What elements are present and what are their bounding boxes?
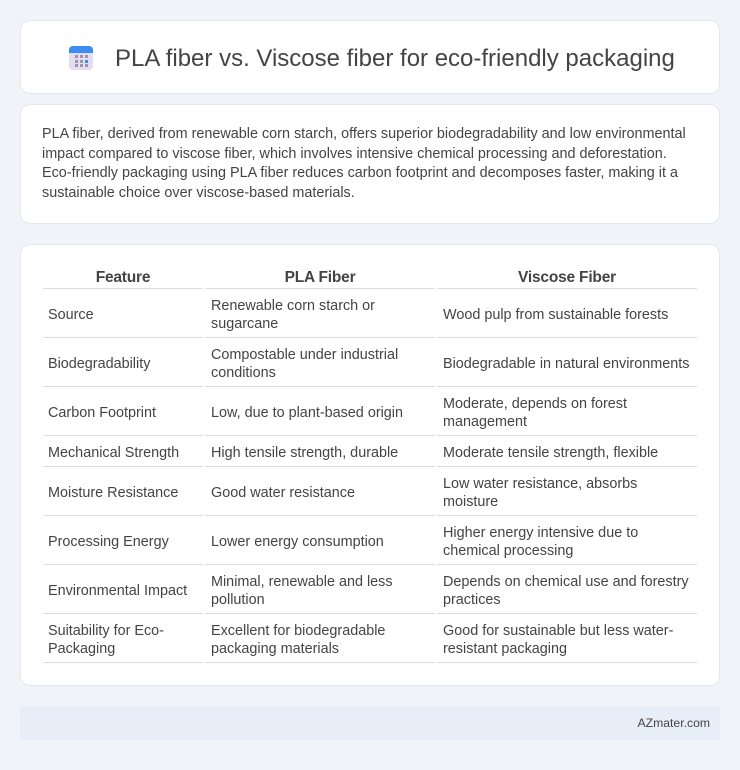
row: Moisture Resistance: moisture — [443, 494, 498, 510]
row: Moisture Resistance: Moisture Resistance — [48, 485, 178, 501]
row: Carbon Footprint: management — [443, 414, 527, 430]
row: Biodegradability: Biodegradable in natural environments — [443, 356, 689, 372]
row: Moisture Resistance: Low water resistance, absorbs — [443, 476, 637, 492]
row: Carbon Footprint: Low, due to plant-based origin — [211, 405, 403, 421]
row: Mechanical Strength: High tensile strength, durable — [211, 445, 398, 461]
intro text: impact compared to viscose fiber, which involves intensive chemical processing and deforestation. — [42, 146, 667, 162]
row: Suitability for Eco-Packaging: Packaging — [48, 641, 115, 657]
row: Carbon Footprint: Carbon Footprint — [48, 405, 156, 421]
header panel — [20, 20, 720, 94]
footer credit: AZmater.com — [638, 716, 710, 730]
row: Source — [48, 298, 668, 332]
row: Mechanical Strength: Moderate tensile strength, flexible — [443, 445, 658, 461]
row: Mechanical Strength: Mechanical Strength — [48, 445, 179, 461]
header: Feature: Feature — [96, 269, 150, 286]
header: Viscose Fiber: Viscose Fiber — [518, 269, 616, 286]
row: Processing Energy: Higher energy intensive due to — [443, 525, 638, 541]
row: Processing Energy — [48, 525, 638, 559]
table — [43, 269, 697, 663]
row: Suitability for Eco-Packaging: Good for sustainable but less water- — [443, 623, 673, 639]
intro text: sustainable choice over viscose-based materials. — [42, 185, 355, 201]
row: Processing Energy: Lower energy consumption — [211, 534, 384, 550]
row: Environmental Impact: Minimal, renewable and less — [211, 574, 393, 590]
header: PLA Fiber: PLA Fiber — [285, 269, 355, 286]
intro text — [42, 126, 686, 201]
row: Suitability for Eco-Packaging: Excellent for biodegradable — [211, 623, 385, 639]
intro text: PLA fiber, derived from renewable corn starch, offers superior biodegradability and low environmental — [42, 126, 686, 142]
row: Suitability for Eco-Packaging: Suitability for Eco- — [48, 623, 164, 639]
row: Moisture Resistance: Good water resistance — [211, 485, 355, 501]
row: Source: Renewable corn starch or — [211, 298, 375, 314]
intro panel — [20, 104, 720, 224]
row: Source: sugarcane — [211, 316, 278, 332]
row: Environmental Impact: Depends on chemical use and forestry — [443, 574, 689, 590]
row: Carbon Footprint: Moderate, depends on forest — [443, 396, 627, 412]
row: Mechanical Strength — [48, 445, 658, 461]
row: Processing Energy: chemical processing — [443, 543, 573, 559]
comparison table panel — [20, 244, 720, 686]
row: Processing Energy: Processing Energy — [48, 534, 169, 550]
row: Environmental Impact: pollution — [211, 592, 265, 608]
row: Biodegradability: conditions — [211, 365, 276, 381]
row: Biodegradability — [48, 347, 689, 381]
title: PLA fiber vs. Viscose fiber for eco-friendly packaging — [115, 45, 675, 72]
row: Environmental Impact: practices — [443, 592, 501, 608]
row: Suitability for Eco-Packaging — [48, 623, 673, 657]
footer bar — [20, 706, 720, 740]
row: Biodegradability: Biodegradability — [48, 356, 150, 372]
row: Environmental Impact: Environmental Impact — [48, 583, 187, 599]
row: Source: Source — [48, 307, 94, 323]
row: Moisture Resistance — [48, 476, 637, 510]
intro text: Eco-friendly packaging using PLA fiber reduces carbon footprint and decomposes faster, making it a — [42, 165, 678, 181]
row: Environmental Impact — [48, 574, 689, 608]
icon: calendar — [69, 46, 93, 70]
row: Suitability for Eco-Packaging: resistant packaging — [443, 641, 567, 657]
row: Suitability for Eco-Packaging: packaging materials — [211, 641, 339, 657]
row: Source: Wood pulp from sustainable forests — [443, 307, 668, 323]
row: Carbon Footprint — [48, 396, 627, 430]
row: Biodegradability: Compostable under industrial — [211, 347, 398, 363]
